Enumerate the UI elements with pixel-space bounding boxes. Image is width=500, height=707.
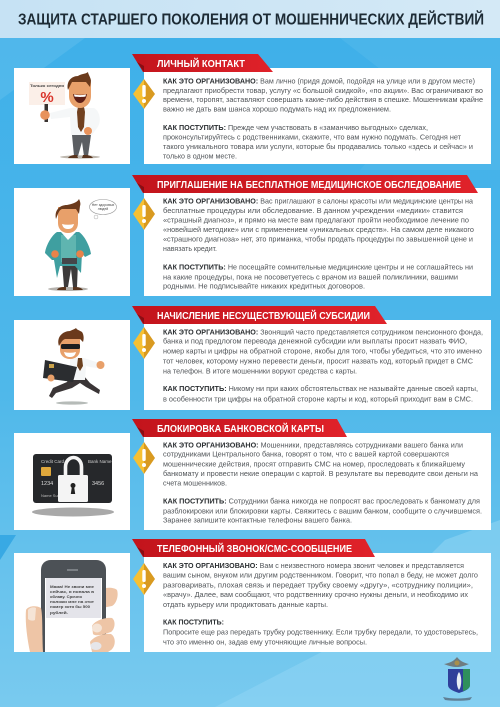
illustration: running thief with card	[14, 320, 130, 410]
ribbon heading	[132, 306, 387, 324]
text card: вашим сыном, внуком или другим родственником. Говорит, что попал в беду, не может долго	[163, 571, 478, 580]
text card: сотрудниками Центрального банка, говорят о том, что с вашей картой совершаются	[163, 450, 449, 459]
panel: несуществующая субсидия	[14, 306, 491, 410]
text card: банкомату и провести некие операции с картой. В результате вы переводите свои деньги на	[163, 469, 479, 478]
illustration: fake doctor	[14, 188, 130, 296]
illustration: hand holding phone with SMS: рублей.	[50, 610, 68, 615]
text card: разговаривать, плохая связь и передает трубку своему «другу», «сотруднику полиции»,	[163, 580, 473, 589]
text card	[144, 553, 491, 652]
text card: КАК ПОСТУПИТЬ: Никому ни при каких обстоятельствах не называйте данные своей карты,	[163, 384, 478, 393]
text card	[144, 188, 491, 296]
ribbon heading	[132, 54, 273, 72]
text card: «страшный диагноз», и прямо на месте вам предлагают пройти необходимое лечение по	[163, 216, 469, 224]
text card: тот человек, которому нужно перевести деньги, просит назвать код, который придет в СМС	[163, 357, 473, 366]
text card: «страшного диагноза» нет, это приманка, чтобы продать процедуры по завышенной цене и	[163, 235, 473, 244]
icon: warning diamond	[133, 442, 155, 474]
text card: в особенности три цифры на обратной стороне карты и код, который приходит вам в СМС.	[163, 394, 473, 403]
ribbon heading: НАЧИСЛЕНИЕ НЕСУЩЕСТВУЮЩЕЙ СУБСИДИИ	[157, 309, 370, 322]
text card: такого уникального товара или услуги, которые бы продавались только «здесь и сейчас» и	[163, 142, 473, 151]
icon: warning diamond	[133, 198, 155, 230]
illustration: fake doctor: людей	[98, 207, 108, 211]
illustration: bank card with padlock	[14, 433, 130, 530]
text card: важно не дать вам шанса хорошо подумать над их предложением.	[163, 104, 391, 114]
illustration: man with discount sign: %	[40, 89, 54, 106]
text card: навязать кредит.	[163, 244, 217, 253]
illustration: fake doctor: Нет здоровых	[92, 203, 114, 207]
ribbon heading	[132, 175, 478, 193]
text card: КАК ПОСТУПИТЬ: Не посещайте сомнительные медицинские центры и не соглашайтесь ни	[163, 263, 473, 272]
text card	[144, 68, 491, 164]
panel: бесплатное обследование	[14, 175, 491, 296]
illustration: man with discount sign: Только сегодня	[30, 83, 65, 88]
illustration: hand holding phone with SMS	[14, 553, 130, 652]
illustration: bank card with padlock: 3456	[92, 481, 104, 487]
text card: проконсультируйтесь с родственниками, скажите, что вам нужно подумать. Сегодня нет	[163, 132, 462, 142]
text card: разблокировки или блокировки карты. Свяжитесь с вашим банком, сообщите о случившемся.	[163, 506, 482, 515]
text card: банка и под предлогом перевода денежной субсидии или выплаты просит назвать ФИО,	[163, 337, 467, 346]
icon: warning diamond	[133, 79, 155, 109]
text card: что это именно он, задав ему уточняющие личные вопросы.	[163, 637, 367, 646]
text card: КАК ПОСТУПИТЬ: Сотрудники банка никогда не попросят вас проследовать к банкомату для	[163, 497, 480, 506]
ribbon heading: ЛИЧНЫЙ КОНТАКТ	[157, 57, 245, 70]
text card: «врачу». Далее, вам сообщают, что родственнику срочно нужны деньги, и необходимо их	[163, 590, 468, 599]
text card: КАК ЭТО ОРГАНИЗОВАНО: Вам с неизвестного номера звонит человек и представляется	[163, 561, 464, 570]
icon: warning diamond	[133, 563, 155, 595]
text card: КАК ПОСТУПИТЬ: Прежде чем участвовать в «заманчиво выгодных» сделках,	[163, 123, 428, 132]
panel: блокировка карты	[14, 419, 491, 530]
text card: КАК ЭТО ОРГАНИЗОВАНО: Вас приглашают в салоны красоты или медицинские центры на	[163, 196, 474, 205]
text card: номер карты и цифры на обратной стороне, якобы для того, чтобы убедиться, что это именно	[163, 347, 482, 356]
icon: warning diamond	[133, 327, 155, 359]
text card: КАК ЭТО ОРГАНИЗОВАНО: Звонящий часто представляется сотрудником пенсионного фонда,	[163, 327, 483, 336]
text card: мошеннические действия, просят отправить СМС на номер, проследовать к ближайшему	[163, 459, 465, 468]
text card: КАК ЭТО ОРГАНИЗОВАНО: Вам лично (придя домой, подойдя на улице или в другом месте)	[163, 77, 475, 86]
text card: предлагают приобрести товар, услугу «с большой скидкой», «по акции». Вас ограничивают во	[163, 86, 483, 95]
text card: «новейшей методике» или с применением «уникальных средств». На самом деле никакого	[163, 225, 474, 234]
text card: отдать курьеру или продиктовать данные карты.	[163, 600, 328, 609]
text card: на телефон. В итоге мошенники воруют средства с карты.	[163, 366, 357, 375]
illustration: hand holding phone with SMS: облаву. Срочно	[50, 594, 83, 599]
ribbon heading: ТЕЛЕФОННЫЙ ЗВОНОК/СМС-СООБЩЕНИЕ	[157, 542, 352, 555]
text card: времени, торопят, заставляют совершать какие-либо действия в спешке. Мошенникам крайне	[163, 95, 483, 104]
text card	[144, 433, 491, 530]
emblem: police crest	[443, 657, 472, 701]
illustration: bank card with padlock: Bank Name	[88, 459, 112, 464]
ribbon heading: ПРИГЛАШЕНИЕ НА БЕСПЛАТНОЕ МЕДИЦИНСКОЕ ОБСЛЕДОВАНИЕ	[157, 180, 461, 191]
illustration: bank card with padlock: Credit Card	[41, 459, 65, 464]
text card: родными. Не подписывайте никаких кредитных договоров.	[163, 282, 365, 291]
text card: КАК ЭТО ОРГАНИЗОВАНО: Мошенники, представляясь сотрудниками вашего банка или	[163, 441, 463, 450]
panel: личный контакт	[14, 54, 491, 164]
ribbon heading	[132, 419, 347, 437]
text card	[144, 320, 491, 410]
ribbon heading: БЛОКИРОВКА БАНКОВСКОЙ КАРТЫ	[157, 422, 324, 435]
illustration: hand holding phone with SMS: номер хотя бы 500	[50, 604, 91, 609]
illustration: man with discount sign	[14, 68, 130, 164]
text card: бесплатные процедуры или обследование. В данном учреждении «медики» ставится	[163, 206, 463, 215]
text card: на какие процедуры, пока не посоветуетесь с врачом из вашей поликлиники, вашими	[163, 272, 458, 281]
text card: только в одном месте.	[163, 152, 237, 160]
text card: КАК ПОСТУПИТЬ:	[163, 618, 224, 627]
panel: телефонный звонок	[14, 539, 491, 652]
text card: Попросите еще раз передать трубку родственнику. Если трубку передали, то удостоверьтесь,	[163, 627, 478, 636]
illustration: bank card with padlock: 1234	[41, 481, 53, 487]
text card: Заранее запишите контактные телефоны вашего банка.	[163, 516, 352, 525]
title band	[0, 0, 500, 38]
illustration: hand holding phone with SMS: положи мне на этот	[50, 599, 94, 604]
text card: счета мошенников.	[163, 478, 227, 487]
ribbon heading	[132, 539, 375, 557]
illustration: hand holding phone with SMS: Мама! Не звони мне	[50, 584, 95, 589]
illustration: bank card with padlock: Name Surname	[41, 493, 70, 498]
illustration: hand holding phone with SMS: сейчас, я попала в	[50, 589, 95, 594]
